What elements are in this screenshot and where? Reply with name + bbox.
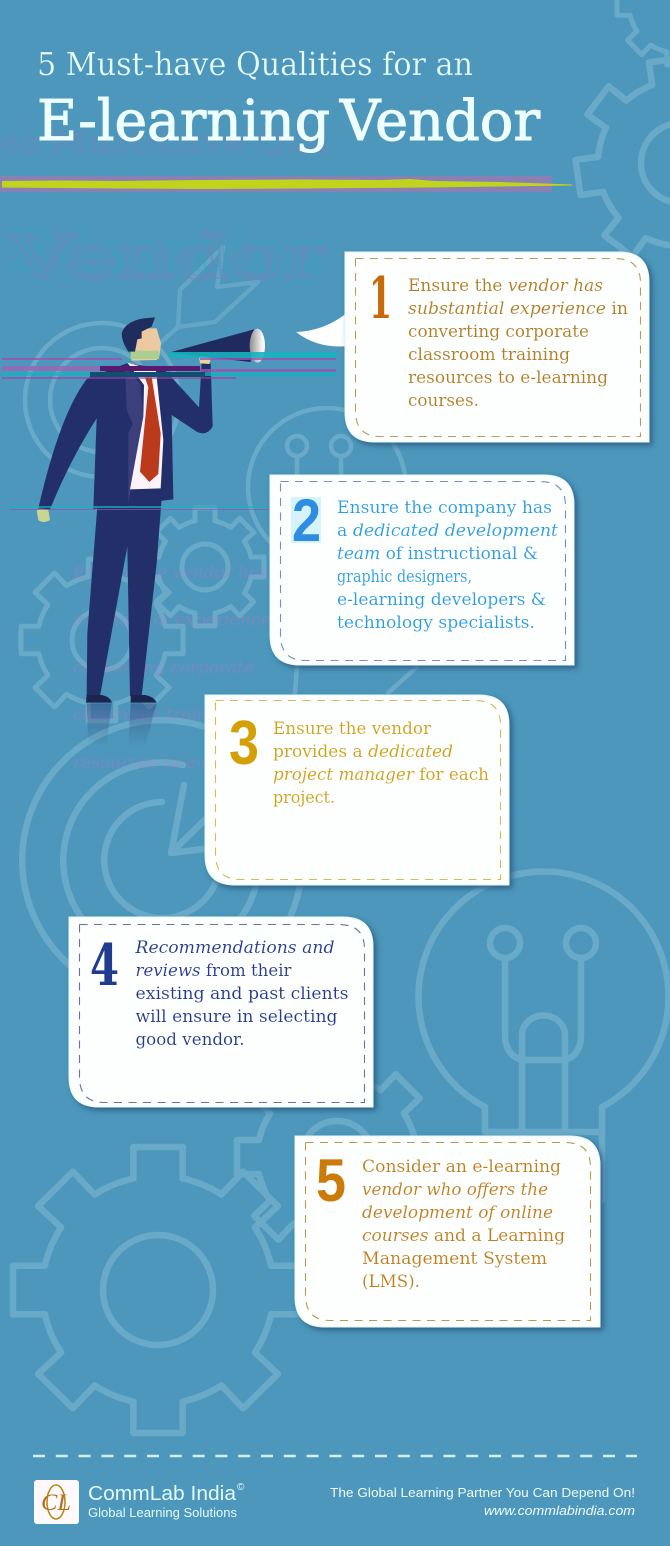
title line 2: E-learning [37, 89, 330, 154]
icon: gear top right corner [617, 0, 670, 65]
ghost heading artifact behind title: es Must-have Qua [0, 125, 330, 160]
tie [140, 377, 161, 482]
neck tint [131, 351, 159, 359]
icon: large gear bottom left [13, 1147, 303, 1433]
megaphone mouth [250, 329, 265, 363]
copyright mark: © [237, 1482, 245, 1493]
text 5: (LMS). [362, 1272, 420, 1291]
ghost body text artifact under man: classroom training [73, 705, 235, 724]
ghost body text artifact under man: Ensure the vendor has [72, 563, 268, 582]
text 2: e-learning developers & [337, 590, 546, 609]
icon: large target [22, 720, 300, 1000]
text 1 [408, 276, 628, 410]
text 5: Consider an e-learning [362, 1157, 561, 1176]
title line 2 [37, 89, 540, 154]
text 4: good vendor. [136, 1030, 244, 1049]
left hand [37, 509, 50, 522]
ghost body text artifact under man: converting corporate [73, 658, 254, 677]
text 5: development of online [362, 1203, 553, 1222]
icon: upper target rings [25, 323, 179, 477]
icon: gear left of man [21, 559, 183, 721]
text 5: Management System [362, 1249, 547, 1268]
icon: small gear right of man [146, 508, 264, 626]
title line 2: Vendor [339, 89, 540, 154]
number 2 [291, 497, 321, 543]
partner slogan: The Global Learning Partner You Can Depend On! [330, 1485, 635, 1500]
underline brush stripe [0, 176, 572, 192]
panel: card 2 [270, 475, 574, 665]
text 4: existing and past clients [136, 984, 348, 1003]
text 1: converting corporate [408, 322, 589, 341]
text 5: courses and a Learning [362, 1226, 565, 1245]
panel: card 5 [295, 1136, 600, 1327]
megaphone cone [169, 329, 254, 362]
text 3: provides a dedicated [273, 742, 453, 761]
footer [34, 1480, 635, 1524]
trousers [87, 498, 162, 696]
icon: CommLab logo [34, 1480, 79, 1524]
hair [122, 317, 155, 352]
text 3: project. [273, 788, 335, 807]
icon: large light bulb [419, 872, 668, 1200]
shirt [127, 363, 163, 489]
footer dashed rule [33, 1455, 637, 1457]
raised hand [198, 352, 211, 364]
icon: gear top right [564, 46, 670, 280]
text 1: substantial experience in [408, 299, 628, 318]
icon: gear behind cards 4 and 5 [237, 1057, 437, 1257]
icon: small bulb behind card 2 [248, 408, 417, 693]
text 5: vendor who offers the [362, 1180, 548, 1199]
text 5 [362, 1157, 565, 1291]
text 3: Ensure the vendor [273, 719, 431, 738]
jacket lapel [125, 367, 143, 504]
shoe reflections [87, 703, 157, 747]
text 2: team of instructional & [337, 544, 538, 563]
illustration: businessman with megaphone [37, 317, 265, 747]
text 2: technology specialists. [337, 613, 535, 632]
text 1: resources to e-learning [408, 368, 608, 387]
panel: card 4 [69, 917, 373, 1107]
text 2: graphic designers, [337, 567, 472, 586]
panel: card 3 [205, 695, 509, 885]
panel: card 2: 2 [292, 487, 321, 554]
speech bubble tail [296, 312, 348, 346]
neck and face [132, 328, 161, 361]
ghost body text artifact under man: substantial experience in [73, 610, 293, 629]
brand tagline: Global Learning Solutions [88, 1506, 237, 1520]
jacket and arms [38, 363, 213, 509]
text 3 [273, 719, 489, 807]
text 4: reviews from their [136, 961, 292, 980]
text 2 [337, 498, 558, 632]
title [37, 45, 540, 154]
text 4: will ensure in selecting [136, 1007, 338, 1026]
ghost body text artifact under man: resources to e-learning [73, 753, 273, 772]
text 1: classroom training [408, 345, 570, 364]
text 3: project manager for each [273, 765, 489, 784]
website: www.commlabindia.com [484, 1503, 635, 1518]
number 5: 5 [316, 1147, 346, 1214]
text 4: Recommendations and [134, 938, 334, 957]
text 1: Ensure the vendor has [408, 276, 603, 295]
ghost body text artifact under man [72, 563, 293, 772]
brand name: CommLab India [88, 1483, 237, 1505]
text 2: a dedicated development [337, 521, 558, 540]
title line 1: 5 Must-have Qualities for an [37, 45, 473, 83]
number 3: 3 [229, 709, 259, 778]
shoes [86, 695, 157, 703]
number 4: 4 [90, 932, 119, 999]
text 1: courses. [408, 391, 479, 410]
text 4 [134, 938, 348, 1049]
icon: CommLab logo: CL [41, 1490, 71, 1515]
icon: upper dart arrow [150, 247, 258, 352]
number 1: 1 [369, 265, 392, 332]
ghost text artifact below stripe: E-learning [10, 219, 325, 284]
text 2: Ensure the company has [337, 498, 552, 517]
scan stripe artifacts [2, 352, 337, 510]
ghost text artifact below stripe: Vendor [9, 223, 325, 293]
panel: card 1 [345, 252, 649, 442]
